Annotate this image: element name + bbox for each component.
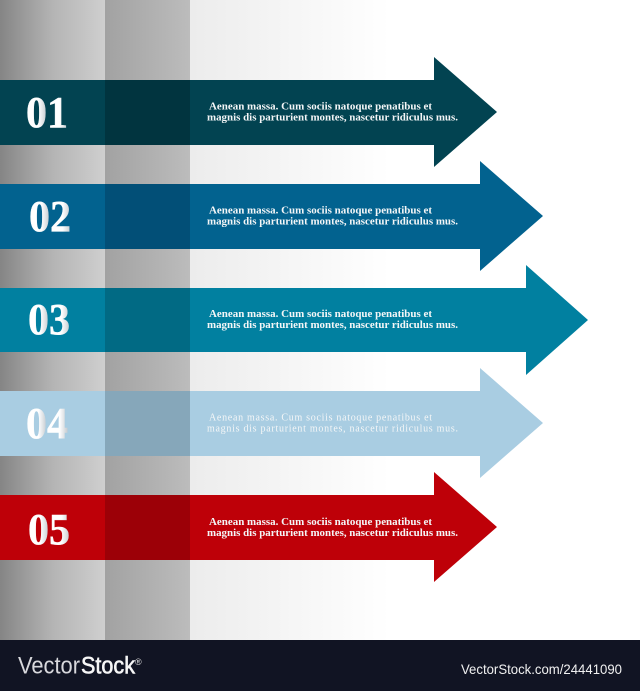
text: arrow 01 (207, 102, 459, 124)
text: arrow 04: Aenean massa. Cum sociis natoque penatibus et (209, 412, 432, 424)
text: arrow 05 (207, 517, 459, 539)
text: arrow 04 (207, 412, 458, 434)
footer logo: Stock (81, 652, 136, 680)
text: arrow 02 (207, 206, 459, 228)
text: arrow 01: Aenean massa. Cum sociis natoque penatibus et (209, 102, 433, 112)
text: arrow 05: magnis dis parturient montes, nascetur ridiculus mus. (207, 528, 459, 539)
text: arrow 02: Aenean massa. Cum sociis natoque penatibus et (209, 206, 433, 216)
number 03: 03 (28, 295, 70, 344)
text: arrow 03 (207, 309, 459, 331)
text: arrow 03: Aenean massa. Cum sociis natoque penatibus et (209, 309, 433, 320)
number 01: 01 (26, 88, 68, 137)
footer logo (18, 652, 136, 680)
arrow 05 (0, 472, 497, 582)
footer url: VectorStock.com/24441090 (461, 661, 622, 677)
text: arrow 03: magnis dis parturient montes, nascetur ridiculus mus. (207, 320, 459, 331)
footer logo: Vector (18, 652, 80, 680)
registered mark: ® (135, 657, 142, 667)
number 05: 05 (28, 505, 70, 554)
number 02: 02 (29, 192, 71, 241)
text: arrow 01: magnis dis parturient montes, nascetur ridiculus mus. (207, 112, 459, 124)
arrow 03 (0, 265, 588, 375)
text: arrow 05: Aenean massa. Cum sociis natoque penatibus et (209, 517, 433, 528)
arrow 01 (0, 57, 497, 167)
text: arrow 02: magnis dis parturient montes, nascetur ridiculus mus. (207, 216, 459, 228)
arrow 04 (0, 368, 543, 478)
text: arrow 04: magnis dis parturient montes, nascetur ridiculus mus. (207, 424, 458, 434)
number 04: 04 (26, 399, 68, 448)
arrow 02 (0, 161, 543, 271)
footer bar (0, 640, 640, 691)
